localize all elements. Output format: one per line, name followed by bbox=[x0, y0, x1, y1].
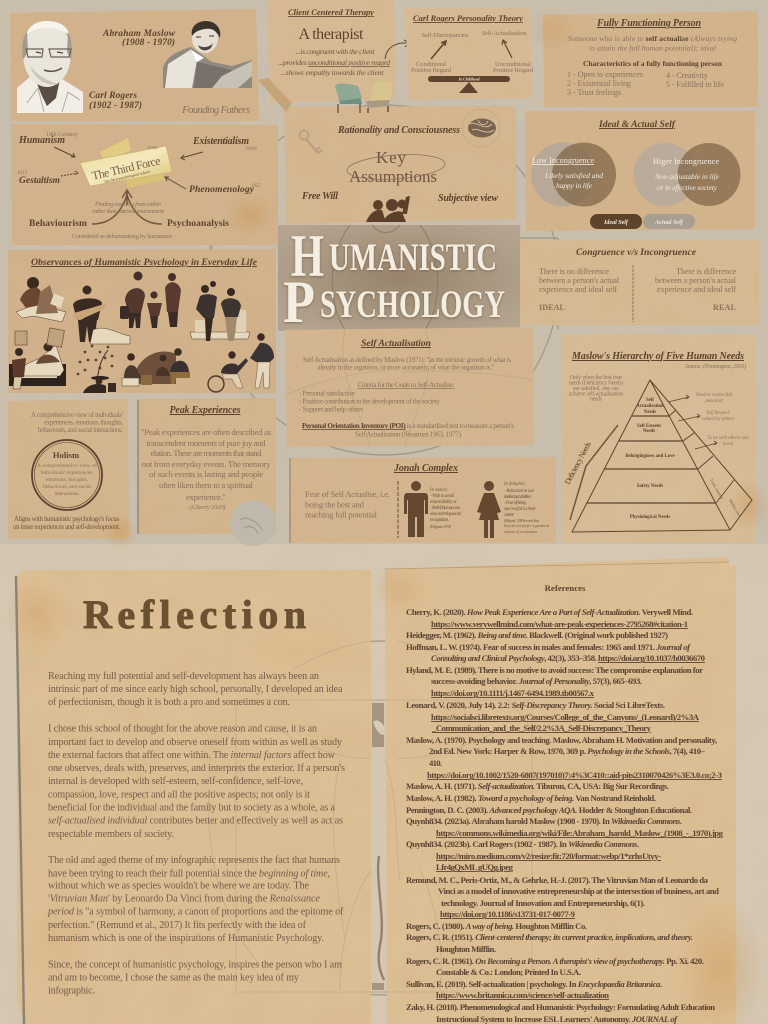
list: characteristics: 3 - Trust feelings bbox=[567, 88, 621, 97]
photo: Abraham Maslow bbox=[163, 21, 252, 88]
text: peak quote: of such events is lasting and people bbox=[149, 469, 263, 479]
panel: reflection bbox=[6, 570, 371, 1024]
text: Rogers name: (1902 - 1987) bbox=[89, 100, 142, 111]
divider bbox=[632, 265, 634, 322]
pyramid: Need to realise full bbox=[695, 393, 733, 398]
text: paragraph 2: respectable members of society. bbox=[48, 829, 174, 840]
reference list: Consulting and Clinical Psychology, 42(3), 353–358. https://doi.org/10.1037/h0036670 bbox=[431, 653, 706, 663]
reference list: Quynh834. (2023a). Abraham harold Maslow (1908 - 1970). In Wikimedia Commons. bbox=[406, 816, 682, 826]
text: incongruence: experience and ideal self bbox=[657, 285, 736, 294]
labels: schools of thought: Behaviourism bbox=[29, 218, 87, 229]
illustration: family walking bbox=[120, 272, 181, 328]
pyramid: Self Respect bbox=[706, 411, 730, 416]
reference list: Maslow, A. (1970). Psychology and teaching. Maslow, Abraham H. Motivation and personality, bbox=[406, 735, 717, 745]
reference list: Hoffman, L. W. (1974). Fear of success in males and females: 1965 and 1971. Journal of bbox=[406, 642, 691, 652]
text: criteria: - Personal satisfaction bbox=[299, 390, 355, 398]
illustration: couch scene bbox=[9, 328, 66, 389]
heading: key assumptions: Assumptions bbox=[349, 167, 437, 186]
text: Maslow name: (1908 - 1970) bbox=[122, 37, 175, 48]
venn: low incongruence bbox=[531, 142, 616, 206]
labels: theory terms: Conditional bbox=[416, 61, 446, 68]
text: in males: recognition. bbox=[430, 518, 449, 523]
text: paragraph 2: compassion, love, respect and all the positive aspects; not only is it bbox=[48, 790, 310, 800]
text: holism intro: A comprehensive view of individuals' bbox=[31, 412, 123, 419]
caption: finding meaning: rather than external environment bbox=[92, 208, 164, 215]
text: definition bbox=[568, 34, 737, 52]
badge: holism circle: behaviours, and social bbox=[43, 484, 91, 490]
text: peak quote: "Peak experiences are often described as bbox=[141, 427, 272, 437]
title: humanistic psychology: P bbox=[283, 269, 315, 335]
reference list: https://doi.org/10.1186/s13731-017-0077-9 bbox=[440, 909, 576, 919]
bracket: deficiency needs: Deficiency Needs bbox=[563, 440, 593, 486]
text: paragraph 2: the external factors that affect one within. The internal factors affect how bbox=[48, 750, 336, 761]
decorative ellipse around heading bbox=[346, 152, 446, 182]
text: paragraph 4: infographic. bbox=[48, 986, 95, 996]
text: therapist qualities: ...provides unconditional positive regard bbox=[278, 58, 390, 67]
text: fear of self actualise bbox=[305, 489, 390, 520]
labels: schools of thought: Phenomenology bbox=[189, 184, 255, 195]
panel: congruence vs incongruence bbox=[520, 240, 759, 325]
reference list bbox=[406, 607, 724, 1024]
text: holism footer: Aligns with humanistic psychology's focus bbox=[14, 516, 119, 523]
text: peak quote: experience." bbox=[186, 492, 226, 502]
text: fear of self actualise: being the best and bbox=[305, 500, 365, 510]
tape strip bbox=[258, 78, 292, 112]
labels: theory terms bbox=[411, 30, 534, 74]
legend pills bbox=[590, 214, 695, 229]
text: in females: intellectual abilities bbox=[504, 495, 531, 500]
heading: observances: Observances of Humanistic Psychology in Everyday Life bbox=[31, 257, 258, 268]
labels: theory terms: Positive Regard bbox=[493, 67, 534, 74]
text: POI bbox=[302, 422, 514, 438]
reference list: https://miro.medium.com/v2/resize:fit:720/format:webp/1*zrhsUtyy- bbox=[436, 851, 661, 861]
list: characteristics bbox=[567, 70, 724, 97]
text: in males: - Wish to avoid bbox=[430, 494, 455, 499]
text: POI: Personal Orientation Inventory (POI) is a standardised test to measure a person's bbox=[302, 422, 514, 430]
panel: peak experiences bbox=[137, 398, 276, 546]
badge: holism circle: individuals' experiences, bbox=[40, 470, 94, 476]
reference list: Pennington, D. C. (2003). Advanced psychology AQA. Hodder & Stoughton Educational. bbox=[406, 805, 692, 815]
reference list: _Communication_and_the_Self/2.2%3A_Self-Discrepancy_Theory bbox=[431, 723, 652, 733]
reference list: https://doi.org/10.1111/j.1467-6494.1989.tb00567.x bbox=[431, 688, 595, 698]
pyramid: To be with others and bbox=[707, 436, 749, 441]
labels: theory terms: Self-Actualisation bbox=[482, 30, 527, 37]
panel: jonah complex bbox=[290, 457, 556, 543]
text: paragraph 4: and am to become, I chose the same as the main key idea of my bbox=[48, 972, 300, 984]
text: fear of self actualise: Fear of Self Actualise, i.e. bbox=[305, 489, 390, 499]
text: paragraph 3: The old and aged theme of my infographic represents the fact that humans bbox=[48, 855, 340, 866]
reference list: Instructional System to Increase ESL Learners' Autonomy. JOURNAL of bbox=[436, 1014, 678, 1024]
panel: ideal and actual self bbox=[525, 111, 755, 231]
venn: low incongruence: Low Incongruence bbox=[532, 156, 594, 165]
divider bbox=[397, 481, 399, 538]
text: paragraph 3: humanism which is one of the inspirations of Humanistic Psychology. bbox=[48, 933, 324, 944]
text: in males: does not bring social bbox=[430, 512, 462, 517]
venn: higher incongruence: Non adjustable in life bbox=[654, 172, 720, 181]
reference list: Cherry, K. (2020). How Peak Experience Are a Part of Self-Actualization. Verywell Mind. bbox=[406, 607, 693, 617]
reference list: Rogers, C. (1980). A way of being. Houghton Mifflin Co. bbox=[406, 921, 587, 931]
title: humanistic psychology: H bbox=[291, 223, 324, 289]
labels: schools of thought: Gestaltism bbox=[19, 175, 60, 186]
text: therapist qualities: ...is congruent with the client bbox=[296, 47, 375, 56]
pyramid: Actualisation bbox=[636, 404, 664, 409]
panel: maslow hierarchy bbox=[561, 334, 768, 543]
reference list: success-avoiding behavior. Journal of Personality, 57(3), 665–693. bbox=[431, 676, 642, 686]
ribbon: the third force: The third psychological school bbox=[103, 170, 150, 184]
text: paragraph 4: Since, the concept of humanistic psychology, inspires the person who I am bbox=[48, 960, 342, 970]
venn: higher incongruence bbox=[634, 143, 740, 206]
reference list: https://doi.org/10.1002/1520-6807(197010)7:4%3C410::aid-pits2310070426%3E3.0.co;2-3 bbox=[427, 770, 723, 780]
text: paragraph 3 bbox=[47, 855, 344, 944]
panel: title bbox=[278, 223, 520, 335]
text: Maslow name bbox=[102, 29, 176, 48]
text: congruence: IDEAL bbox=[539, 303, 566, 312]
title: humanistic psychology: UMANISTIC bbox=[329, 236, 497, 279]
text: paragraph 2: one observes, deals with, preserves, and interprets the exterior. If a person's bbox=[48, 763, 345, 774]
icon: two armchairs bbox=[335, 81, 393, 113]
note: deficiency: needs bbox=[590, 396, 603, 402]
text: paragraph 3: perfection." (Remund et al., 2017) It fits perfectly with the idea of bbox=[48, 920, 307, 931]
text: incongruence bbox=[655, 267, 737, 312]
reference list: Leonard, V. (2020, July 14). 2.2: Self-Discrepancy Theory. Social Sci LibreTexts. bbox=[406, 700, 665, 710]
note: deficiency: Only when the first four bbox=[570, 374, 622, 381]
text: definition bbox=[303, 356, 511, 372]
text: paragraph 4 bbox=[48, 960, 342, 996]
side labels on pyramid: Shelter, rest bbox=[727, 498, 742, 518]
label: subjective view: Subjective view bbox=[438, 193, 498, 204]
text: peak quote bbox=[141, 427, 272, 511]
note: deficiency: achieve self-actualisation bbox=[569, 390, 623, 398]
text: Rogers name bbox=[89, 91, 142, 111]
reference list: Sullivan, E. (2019). Self-actualization | psychology. In Encyclopaedia Britannica. bbox=[406, 979, 662, 989]
pyramid: Safety Needs bbox=[637, 484, 663, 489]
text: paragraph 2: internal is developed with self-esteem, self-confidence, self-love, bbox=[48, 776, 303, 787]
illustration: couple with child bbox=[190, 281, 250, 341]
reference list: Heidegger, M. (1962). Being and time. Blackwell. (Original work published 1927) bbox=[406, 630, 668, 640]
ribbon: the third force: 1950s bbox=[147, 145, 158, 150]
text: definition: Someone who is able to self actualise (Always trying bbox=[568, 34, 737, 43]
text: in females: (Hyland, 1989) noted that bbox=[504, 519, 540, 524]
labels: schools of thought: Existentialism bbox=[192, 136, 249, 147]
pyramid: Belongingness and Love bbox=[625, 454, 675, 459]
reference list: Constable & Co.: London; Printed In U.S.A. bbox=[436, 967, 581, 977]
text: holism intro bbox=[31, 412, 123, 434]
text: criteria: - Support and help others bbox=[299, 406, 363, 414]
text: in females: - Reluctant to use bbox=[504, 489, 535, 494]
bracket: deficiency needs bbox=[563, 425, 618, 520]
venn: low incongruence: Likely satisfied and bbox=[544, 171, 603, 180]
text: incongruence: REAL bbox=[713, 303, 737, 312]
reference list: technology. Journal of Innovation and Entrepreneurship, 6(1). bbox=[441, 898, 645, 908]
text: congruence: experience and ideal self bbox=[539, 285, 617, 294]
text: peak quote: transcendent moments of pure joy and bbox=[146, 438, 266, 448]
text: paragraph 3: 'Vitruvian Man' by Leonardo Da Vinci from during the Renaissance bbox=[48, 894, 320, 904]
text: peak quote: out from everyday events. The memory bbox=[142, 459, 271, 469]
text: in females: career bbox=[504, 513, 514, 518]
reference list: Lfr4gQxML gUQg.jpeg bbox=[436, 862, 514, 872]
legend pills: Actual Self bbox=[654, 220, 684, 226]
list: characteristics: 1 - Open to experiences bbox=[567, 70, 643, 79]
note: deficiency: needs (Deficiency Needs) bbox=[569, 380, 623, 386]
pyramid: loved bbox=[723, 442, 734, 447]
text: paragraph 2 bbox=[48, 724, 345, 840]
text: peak quote: elation. These are moments that stand bbox=[150, 448, 262, 458]
illustration: reader under tree bbox=[77, 345, 116, 393]
subheading: characteristics: Characteristics of a fully functioning person bbox=[583, 59, 723, 68]
venn: higher incongruence: or in effective society bbox=[657, 183, 718, 192]
illustration: camping tent bbox=[122, 348, 190, 386]
pyramid: potential bbox=[704, 399, 723, 404]
heading: personality theory: Carl Rogers Personality Theory bbox=[413, 13, 523, 23]
labels: theory terms: Unconditional bbox=[495, 61, 531, 68]
venn: higher incongruence: Higer Incongruence bbox=[653, 157, 719, 166]
panel: carl rogers personality theory bbox=[405, 8, 534, 100]
text: paragraph 2: self-actualised individual contributes better and effectively as well as act as bbox=[48, 816, 343, 826]
list: characteristics: 5 - Fulfilled in life bbox=[666, 80, 724, 89]
badge: holism circle: interactions. bbox=[54, 491, 80, 497]
panel: self actualisation bbox=[285, 327, 534, 447]
reference list: https://www.verywellmind.com/what-are-peak-experiences-2795268#citation-1 bbox=[431, 619, 688, 629]
reference list: Quynh834. (2023b). Carl Rogers (1902 - 1987). In Wikimedia Commons. bbox=[406, 839, 639, 849]
vitruvian overlay on reflection bbox=[208, 641, 371, 992]
pyramid: Self bbox=[646, 398, 654, 403]
labels: schools of thought bbox=[17, 132, 262, 229]
text: in females: system of evaluation bbox=[504, 530, 537, 534]
reference list: Maslow, A. H. (1982). Toward a psychology of being. Van Nostrand Reinhold. bbox=[406, 793, 656, 803]
text: in females: successful in their bbox=[504, 507, 536, 512]
text: Rogers name: Carl Rogers bbox=[89, 91, 137, 101]
reference list: https://www.britannica.com/science/self-actualization bbox=[436, 990, 609, 1000]
labels: theory terms: Positive Regard bbox=[411, 67, 452, 74]
list: characteristics: 2 - Existential living bbox=[567, 79, 631, 88]
text: congruence: There is no difference bbox=[539, 267, 609, 276]
text: holism intro: experiences, emotions, thoughts, bbox=[44, 420, 123, 426]
text: holism footer bbox=[13, 516, 120, 531]
badge: holism circle: emotions, thoughts, bbox=[46, 477, 89, 483]
icon: brain bbox=[462, 109, 500, 147]
text: paragraph 1: Reaching my full potential and self-development has always been an bbox=[48, 671, 319, 682]
text: paragraph 2: beneficial for the individual and the family but to society as a whole, as a bbox=[48, 802, 335, 814]
photo: Carl Rogers bbox=[17, 21, 83, 113]
heading: fully functioning person: Fully Functioning Person bbox=[596, 18, 701, 29]
heading: reflection: Reflection bbox=[83, 592, 306, 637]
text: Maslow name: Abraham Maslow bbox=[102, 29, 176, 39]
labels: schools of thought: Psychoanalysis bbox=[167, 218, 229, 229]
heading: self actualisation: Self Actualisation bbox=[361, 338, 431, 349]
text: incongruence: There is difference bbox=[676, 267, 736, 276]
text: in males bbox=[429, 488, 462, 529]
text: in females: In females; bbox=[503, 482, 526, 487]
text: paragraph 2: important fact to develop and observe oneself from within as well as study bbox=[48, 737, 343, 748]
pyramid: Needs bbox=[644, 410, 656, 415]
caption: finding meaning: Finding meaning from within bbox=[94, 201, 161, 208]
text: in males: - Belief that success bbox=[430, 506, 460, 511]
heading: rationality and consciousness: Rationality and Consciousness bbox=[337, 125, 460, 136]
text: definition: to attain the full human potential); ideal bbox=[589, 44, 716, 52]
text: in females: - Fear of being bbox=[504, 501, 527, 506]
title: humanistic psychology: SYCHOLOGY bbox=[320, 283, 505, 326]
reference list: Remund, M. C., Peris-Ortiz, M., & Gehrke, H.-J. (2017). The Vitruvian Man of Leonardo da bbox=[406, 875, 709, 885]
labels: schools of thought: 1940s bbox=[245, 147, 257, 152]
text: criteria: Criteria for the Goals to Self-Actualise: bbox=[358, 381, 454, 389]
arrows: theory links bbox=[431, 40, 512, 59]
reference list: Rogers, C. R. (1961). On Becoming a Person. A therapist's view of psychotherapy. Pp. Xi. 420. bbox=[406, 956, 704, 966]
illustration: drummer and friend bbox=[208, 333, 274, 392]
icon: key bbox=[300, 130, 322, 153]
legend pills: Ideal Self bbox=[603, 220, 629, 226]
text: paragraph 3: period is "a symbol of harmony, a canon of proportions and the epitome of bbox=[47, 906, 344, 918]
reference list: https://socialsci.libretexts.org/Courses/College_of_the_Canyons/_(Leonard)/2%3A bbox=[431, 712, 700, 722]
text: congruence bbox=[539, 267, 620, 312]
text: paragraph 2: I chose this school of thought for the above reason and cause, it is an bbox=[48, 724, 317, 734]
note: deficiency bbox=[569, 374, 623, 402]
text: criteria bbox=[299, 381, 454, 414]
text: paragraph 1 bbox=[48, 671, 343, 708]
panel: client centered therapy bbox=[267, 0, 410, 103]
heading: jonah complex: Jonah Complex bbox=[393, 463, 458, 474]
pyramid: valued by others bbox=[702, 417, 734, 422]
heading: ideal and actual self: Ideal & Actual Self bbox=[598, 119, 676, 130]
badge: holism circle: Holism bbox=[53, 450, 80, 460]
text: paragraph 3: have been trying to reach their full potential since the beginning of time, bbox=[48, 868, 330, 880]
reference list: Maslow, A. H. (1971). Self-actualization. Tiburon, CA, USA: Big Sur Recordings. bbox=[406, 781, 669, 791]
source: Source: (Pennington, 2003) bbox=[685, 363, 746, 370]
text: therapist qualities: ...shows empathy towards the client bbox=[280, 68, 384, 77]
labels: schools of thought: 14th Century bbox=[46, 132, 78, 138]
icon: female figure bbox=[477, 481, 501, 538]
reference list: 2nd Ed. New York: Harper & Row, 1970, 369 p. Psychology in the Schools, 7(4), 410– bbox=[429, 746, 706, 756]
heading: maslow hierarchy: Maslow's Hierarchy of Five Human Needs bbox=[571, 351, 744, 362]
arrow: to personality theory bbox=[385, 40, 410, 59]
balance: in childhood: In Childhood bbox=[458, 78, 480, 82]
panel: the third force bbox=[11, 124, 278, 245]
text: definition: Self Actualisation as defined by Maslow (1971): "as the intrinsic growth of what is bbox=[303, 356, 511, 364]
label: free will: Free Will bbox=[301, 191, 338, 202]
reference list: Vinci as a model of innovative entrepreneurship at the intersection of business, art and bbox=[438, 886, 719, 896]
venn: low incongruence: happy in life bbox=[556, 181, 593, 190]
badge: holism circle: A comprehensive view of bbox=[37, 462, 97, 469]
panel: observances bbox=[8, 249, 276, 393]
icon: group of figures bbox=[366, 196, 410, 222]
text: definition: already in the organism, or more accurately, of what the organism is." bbox=[318, 364, 495, 372]
panel: founding fathers bbox=[10, 9, 259, 121]
panel: key assumptions bbox=[284, 106, 516, 224]
arrows to the third force bbox=[54, 147, 203, 224]
text: in males: (Hoffman 1974) bbox=[430, 525, 452, 529]
side labels on pyramid bbox=[708, 478, 742, 518]
title: humanistic psychology bbox=[283, 223, 505, 335]
heading: references: References bbox=[545, 583, 586, 593]
illustration: woman with dog bbox=[16, 277, 66, 322]
note: deficiency: are satisfied, one can bbox=[573, 385, 619, 392]
heading: key assumptions bbox=[349, 148, 437, 186]
badge: holism circle bbox=[32, 440, 102, 510]
text: holism footer: on inner experiences and self-development. bbox=[13, 524, 120, 531]
reference list: Zaky, H. (2018). Phenomenological and Humanistic Psychology: Formulating Adult Education bbox=[406, 1002, 715, 1012]
illustration: guitarist bbox=[73, 286, 130, 344]
caption: finding meaning bbox=[92, 201, 164, 215]
heading: congruence vs incongruence: Congruence v/s Incongruence bbox=[576, 247, 697, 258]
text: incongruence: between a person's actual bbox=[655, 276, 737, 285]
panel: fully functioning person bbox=[528, 6, 758, 107]
text: in females bbox=[503, 482, 549, 534]
reference list: Rogers, C. R. (1951). Client-centered therapy; its current practice, implications, and theory. bbox=[406, 932, 693, 942]
ribbon: the third force bbox=[80, 138, 172, 188]
pyramid: Self Esteem bbox=[637, 424, 661, 429]
text: holism intro: behaviours, and social interactions. bbox=[38, 427, 123, 434]
caption: dehumanising: Considered as dehumanising by humanism bbox=[72, 233, 172, 240]
text: fear of self actualise: reaching full potential bbox=[305, 510, 378, 520]
text: paragraph 1: of perfectionism, though it is both a pro and sometimes a con. bbox=[48, 697, 290, 708]
heading: peak experiences: Peak Experiences bbox=[170, 405, 241, 416]
pyramid: Physiological Needs bbox=[630, 515, 670, 520]
text: in males: In males; bbox=[429, 488, 448, 493]
heading: client centered therapy: Client Centered Therapy bbox=[288, 7, 374, 17]
text: POI: Self Actualisation (Shostrum 1963, 1977) bbox=[355, 430, 462, 438]
text: founding fathers caption: Founding Fathers bbox=[181, 104, 250, 116]
vitruvian man background sketch bbox=[207, 105, 561, 995]
text: peak quote: often liken them to a spiritual bbox=[159, 480, 254, 490]
text: congruence: between a person's actual bbox=[539, 276, 620, 285]
text: in females: they do not prefer a gendered bbox=[504, 524, 549, 528]
panel: holism bbox=[8, 399, 138, 550]
icon: clasped hands circle bbox=[230, 500, 276, 546]
heading: a therapist: A therapist bbox=[298, 26, 364, 43]
pyramid bbox=[572, 380, 752, 532]
reference list: 410. bbox=[429, 758, 442, 768]
panel: references bbox=[370, 557, 766, 1024]
text: paragraph 3: without which we as species wouldn't be where we are today. The bbox=[48, 880, 309, 892]
pyramid: Needs bbox=[643, 429, 655, 434]
icon: male figure bbox=[404, 481, 428, 537]
reference list: https://commons.wikimedia.org/wiki/File:Abraham_harold_Maslow_(1908_-_1970).jpg bbox=[436, 828, 724, 838]
labels: schools of thought: Humanism bbox=[18, 135, 65, 146]
side labels on pyramid: Food, warmth bbox=[708, 478, 725, 500]
text: paragraph 1: intrinsic part of me since early high school, personally, I developed an idea bbox=[48, 684, 343, 695]
vitruvian face strip bbox=[372, 703, 384, 990]
labels: schools of thought: 1927 bbox=[251, 184, 262, 189]
labels: theory terms: Self-Discrepancies bbox=[422, 32, 469, 39]
labels: schools of thought: 1912 bbox=[17, 171, 28, 176]
text: in males: responsibility or bbox=[430, 500, 457, 505]
text: criteria: - Positive contribution to the development of the society bbox=[299, 398, 440, 406]
heading: key assumptions: Key bbox=[376, 148, 406, 167]
ribbon: the third force: The Third Force bbox=[90, 153, 162, 183]
reference list: Houghton Mifflin. bbox=[436, 944, 496, 954]
reference list: Hyland, M. E. (1989). There is no motive to avoid success: The compromise explanation for bbox=[406, 665, 703, 675]
list: characteristics: 4 - Creativity bbox=[666, 71, 709, 80]
text: therapist qualities bbox=[278, 47, 390, 77]
text: peak quote: - (Cherry 2020) bbox=[186, 504, 226, 511]
